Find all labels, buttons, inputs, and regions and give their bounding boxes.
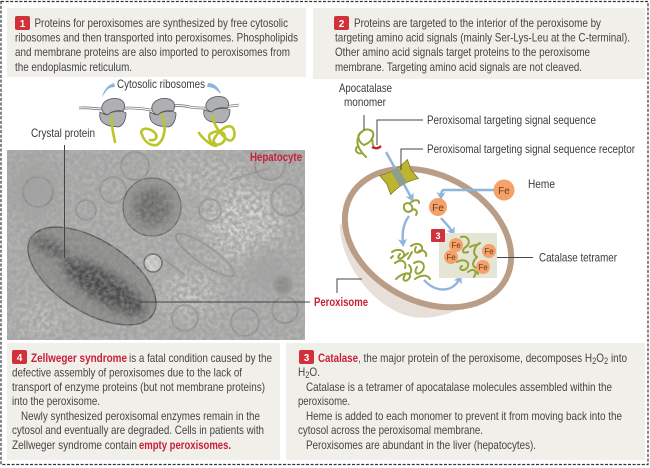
panel 1: synthesis text: Proteins for peroxisomes are synthesized by free cytosolic bbox=[34, 16, 288, 30]
badge 2 bbox=[334, 16, 349, 30]
badge 3: 3 bbox=[304, 353, 310, 364]
catalase tetramer: Fe bbox=[446, 253, 456, 262]
label: crystal protein: Crystal protein bbox=[31, 126, 95, 140]
light patches bbox=[11, 161, 287, 334]
receptor channel bbox=[380, 159, 418, 195]
panel 4: Zellweger syndrome: into the peroxisome. bbox=[12, 394, 100, 408]
label: peroxisome: Peroxisome bbox=[314, 295, 368, 309]
panel 3: catalase: Catalase bbox=[318, 351, 358, 365]
panel 1: synthesis text bbox=[7, 8, 306, 77]
leader: peroxisome bbox=[140, 301, 310, 303]
arrow to tetramer bbox=[424, 278, 460, 290]
panel 4: Zellweger syndrome: empty peroxisomes. bbox=[139, 438, 231, 452]
panel 1: synthesis text: the endoplasmic reticulum. bbox=[15, 60, 132, 74]
panel 2: targeting text: Other amino acid signals target proteins to the peroxisome bbox=[335, 45, 590, 59]
monomer inside bbox=[404, 200, 419, 215]
tetramer label bbox=[497, 256, 533, 258]
bowl shading bbox=[340, 215, 485, 318]
heme group: Fe bbox=[498, 186, 510, 197]
panel 2: targeting text bbox=[313, 8, 645, 79]
iron inside bbox=[429, 198, 447, 216]
panel 3: catalase: Peroxisomes are abundant in the liver (hepatocytes). bbox=[306, 438, 536, 452]
leaders and labels: monomer bbox=[344, 95, 386, 109]
small vesicle bbox=[144, 254, 162, 272]
peroxisome diagram bbox=[321, 81, 635, 335]
ribosome 3 bbox=[204, 96, 230, 123]
leaders and labels bbox=[337, 81, 635, 293]
badge 3 in diagram bbox=[431, 229, 445, 242]
badge 4: 4 bbox=[17, 353, 23, 364]
leaders and labels: Peroxisomal targeting signal sequence bbox=[427, 113, 596, 127]
monomer cluster bbox=[391, 244, 430, 281]
panel 4: Zellweger syndrome: Newly synthesized peroxisomal enzymes remain in the bbox=[21, 409, 260, 423]
curved arrows bbox=[102, 83, 221, 97]
catalase tetramer bbox=[439, 233, 497, 278]
ribosome 1 bbox=[100, 98, 126, 127]
panel 4: Zellweger syndrome: cytosol and eventually are degraded. Cells in patients with bbox=[12, 423, 264, 437]
panel 4: Zellweger syndrome: is a fatal condition caused by the bbox=[129, 351, 272, 365]
panel 2: targeting text: membrane. Targeting amino acid signals are not cleaved. bbox=[335, 60, 582, 74]
panel 3: catalase: O bbox=[596, 351, 604, 365]
leaders and labels: Apocatalase bbox=[339, 81, 392, 95]
heme group bbox=[494, 180, 514, 200]
badge 2: 2 bbox=[339, 19, 345, 30]
badge 3 bbox=[299, 350, 314, 364]
panel 2: targeting text: Proteins are targeted to the interior of the peroxisome by bbox=[354, 16, 601, 30]
leader: crystal protein bbox=[64, 145, 66, 258]
panel 3: catalase: , the major protein of the peroxisome, decomposes H bbox=[358, 351, 640, 365]
monomer with signal sequence bbox=[356, 129, 381, 157]
panel 3: catalase: 2 bbox=[604, 356, 608, 366]
panel 3: catalase: cytosol across the peroxisomal membrane. bbox=[298, 423, 483, 437]
label: hepatocyte: Hepatocyte bbox=[250, 150, 302, 164]
panel 4: Zellweger syndrome bbox=[7, 343, 280, 460]
panel 4: Zellweger syndrome: Zellweger syndrome bbox=[31, 351, 127, 365]
badge 1: 1 bbox=[20, 19, 26, 30]
panel 3: catalase: H bbox=[298, 365, 307, 379]
badge 1 bbox=[15, 16, 30, 30]
catalase tetramer: Fe bbox=[451, 241, 461, 250]
membrane rim bbox=[321, 141, 535, 335]
mRNA strand bbox=[79, 105, 239, 110]
catalase tetramer: Fe bbox=[484, 247, 494, 256]
panel 4: Zellweger syndrome: defective assembly of peroxisomes due to the lack of bbox=[12, 366, 243, 380]
transport arrow bbox=[386, 152, 412, 199]
panel 3: catalase: peroxisome. bbox=[298, 394, 350, 408]
panel 1: synthesis text: ribosomes and then transported into peroxisomes. Phospholipids bbox=[15, 30, 298, 44]
panel 3: catalase bbox=[286, 343, 645, 460]
catalase tetramer: Fe bbox=[478, 263, 488, 272]
badge 4 bbox=[12, 350, 27, 364]
micrograph: hepatocyte with peroxisome bbox=[7, 150, 305, 345]
panel 3: catalase: 2 bbox=[305, 370, 309, 380]
ribosome 2 bbox=[150, 98, 176, 127]
panel 3: catalase: 2 bbox=[592, 356, 596, 366]
panel 3: catalase: O. bbox=[309, 365, 320, 379]
panel 4: Zellweger syndrome: transport of enzyme proteins (but not membrane proteins) bbox=[12, 380, 265, 394]
organelle outlines bbox=[23, 150, 303, 336]
peroxisome diagram: Heme bbox=[528, 177, 555, 191]
round dense body bbox=[123, 178, 181, 236]
panel 4: Zellweger syndrome: Zellweger syndrome contain bbox=[12, 438, 137, 452]
label: cytosolic ribosomes: Cytosolic ribosomes bbox=[117, 77, 205, 91]
panel 3: catalase: into bbox=[608, 351, 627, 365]
iron inside: Fe bbox=[432, 203, 444, 214]
peroxisome body with crystal core bbox=[27, 226, 157, 326]
arrow down bbox=[403, 216, 409, 244]
ribosome diagram bbox=[31, 77, 239, 146]
badge 3 in diagram: 3 bbox=[435, 231, 441, 241]
panel 1: synthesis text: and membrane proteins are also imported to peroxisomes from bbox=[15, 45, 290, 59]
peroxisome diagram: Catalase tetramer bbox=[539, 250, 617, 264]
